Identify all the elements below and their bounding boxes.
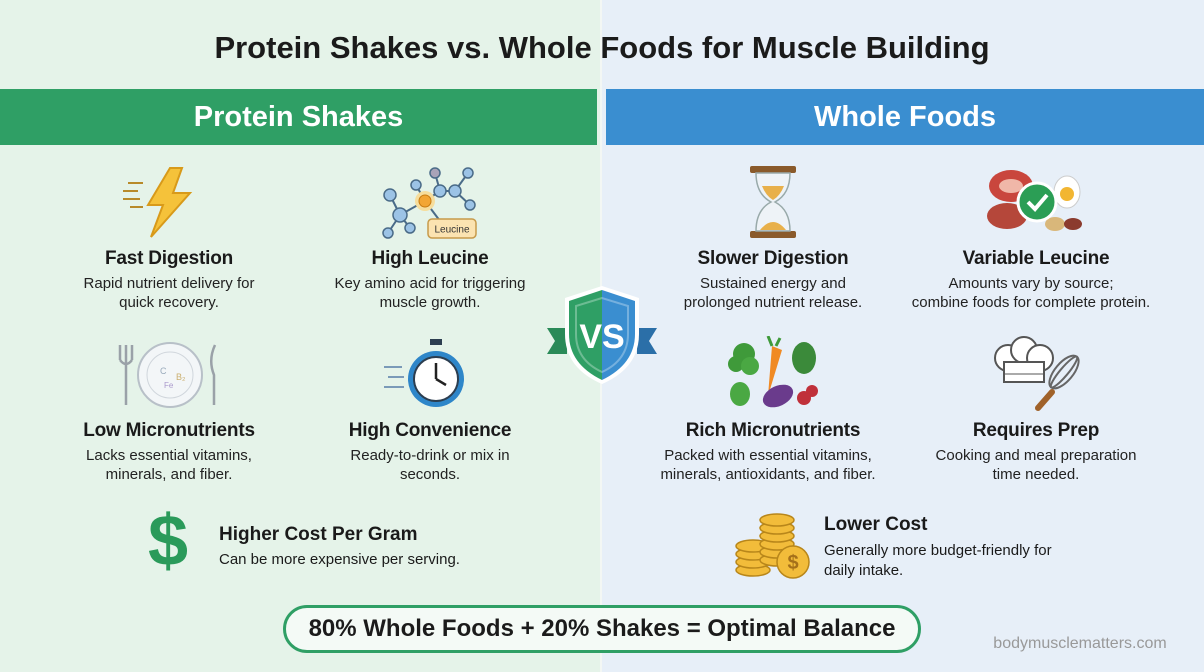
item: slower digestion: Sustained energy and [700, 275, 846, 292]
icon: dollar: $ [148, 501, 188, 581]
header: protein shakes [0, 89, 597, 145]
item: variable leucine: Variable Leucine [963, 248, 1109, 269]
item: rich micronutrients: Rich Micronutrients [686, 420, 860, 441]
icon: plate: C [160, 366, 167, 376]
icon: lightning [123, 167, 192, 238]
background left [0, 0, 600, 672]
item: requires prep: Cooking and meal preparation [936, 447, 1136, 464]
item: lower cost: daily intake. [824, 562, 903, 579]
item: slower digestion [684, 248, 862, 311]
background right [602, 0, 1204, 672]
item: low micronutrients: Lacks essential vitamins, [86, 447, 252, 464]
icon: hourglass [750, 166, 796, 238]
item: variable leucine: Amounts vary by source; [948, 275, 1114, 292]
item: higher cost [219, 524, 460, 568]
header: whole foods [606, 89, 1204, 145]
icon: VS shield: VS [579, 318, 625, 356]
item: requires prep: Requires Prep [973, 420, 1099, 441]
icon: molecule: Leucine [434, 224, 470, 236]
header: protein shakes: Protein Shakes [194, 101, 403, 133]
icon: VS shield [547, 286, 657, 384]
icon: plate: Fe [164, 381, 174, 390]
icon: plate: B₂ [176, 372, 186, 382]
item: fast digestion: Fast Digestion [105, 248, 233, 269]
callout: optimal balance: 80% Whole Foods + 20% Shakes = Optimal Balance [309, 615, 895, 642]
item: variable leucine [912, 248, 1150, 311]
item: rich micronutrients [660, 420, 876, 483]
item: rich micronutrients: Packed with essential vitamins, [664, 447, 872, 464]
item: slower digestion: prolonged nutrient release. [684, 294, 862, 311]
item: requires prep: time needed. [993, 466, 1079, 483]
icon: coins: $ [787, 552, 799, 574]
item: high leucine: muscle growth. [380, 294, 480, 311]
title: Protein Shakes vs. Whole Foods for Muscle Building [214, 30, 990, 65]
item: rich micronutrients: minerals, antioxidants, and fiber. [660, 466, 876, 483]
icon: protein foods [987, 170, 1082, 231]
item: lower cost [824, 514, 1052, 579]
item: fast digestion: quick recovery. [119, 294, 219, 311]
item: low micronutrients: Low Micronutrients [83, 420, 255, 441]
icon: chef hat and whisk [994, 336, 1080, 411]
icon: coins [735, 513, 810, 579]
item: high convenience: High Convenience [349, 420, 511, 441]
icon: molecule [382, 167, 477, 239]
item: high leucine: High Leucine [372, 248, 488, 269]
icon: vegetables [728, 336, 818, 408]
header: whole foods: Whole Foods [814, 101, 996, 133]
item: high convenience [349, 420, 511, 483]
watermark: bodymusclematters.com [993, 635, 1167, 652]
callout: optimal balance [283, 605, 921, 653]
item: higher cost: Can be more expensive per serving. [219, 551, 460, 568]
item: higher cost: Higher Cost Per Gram [219, 524, 418, 545]
item: variable leucine: combine foods for complete protein. [912, 294, 1150, 311]
item: high leucine [335, 248, 525, 311]
item: requires prep [936, 420, 1136, 483]
item: low micronutrients: minerals, and fiber. [106, 466, 232, 483]
item: slower digestion: Slower Digestion [698, 248, 848, 269]
item: lower cost: Lower Cost [824, 514, 927, 535]
icon: plate [118, 342, 216, 408]
item: high leucine: Key amino acid for triggering [335, 275, 525, 292]
item: high convenience: Ready-to-drink or mix in [350, 447, 510, 464]
icon: stopwatch [384, 339, 464, 407]
item: lower cost: Generally more budget-friendly for [824, 542, 1052, 559]
item: high convenience: seconds. [400, 466, 460, 483]
item: low micronutrients [83, 420, 255, 483]
item: fast digestion: Rapid nutrient delivery for [84, 275, 254, 292]
item: fast digestion [84, 248, 254, 311]
